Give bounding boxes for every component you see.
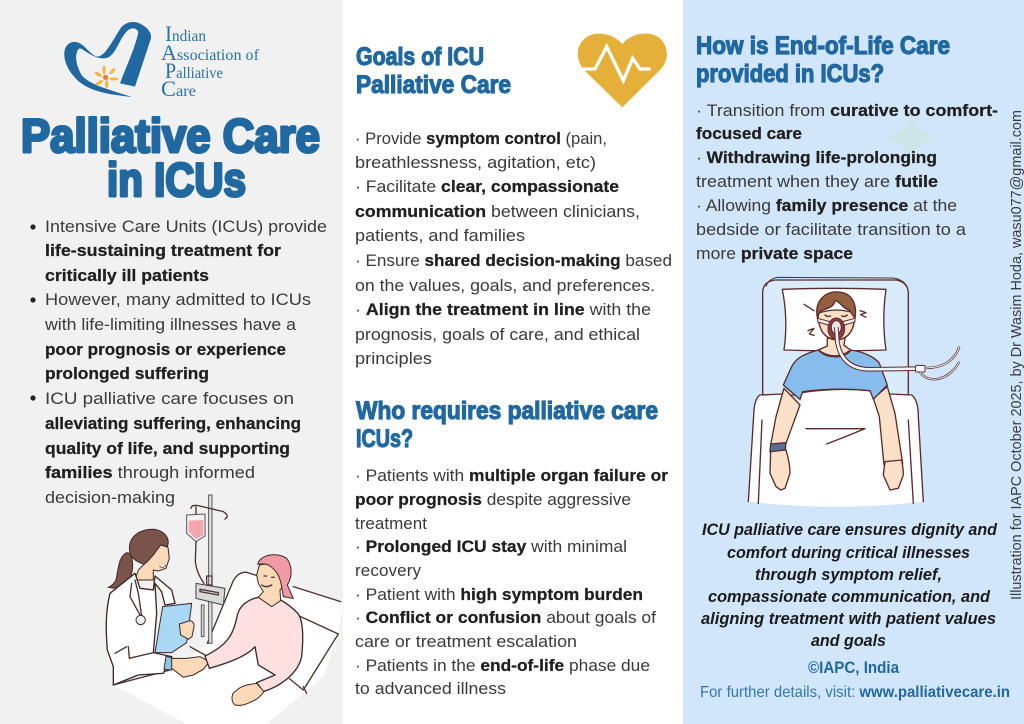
logo wordmark: Care [161, 76, 196, 101]
text block: goals list: · Provide symptom control (pain, [355, 129, 607, 148]
bed [113, 572, 343, 724]
text block: goals list: patients, and families [355, 226, 525, 245]
heading: goals [356, 43, 511, 99]
text block: introduction bullets: prolonged suffering [45, 364, 209, 383]
doctor hand on clipboard [179, 621, 194, 639]
logo sun flower [94, 66, 118, 88]
text block: goals list [355, 129, 672, 368]
heading: who requires palliative care: Who requires palliative care [356, 397, 658, 425]
doctor hair and ponytail [108, 529, 168, 588]
illustration: patient on ventilator mask in bed [748, 277, 959, 507]
heading: how is end-of-life care provided [696, 32, 950, 88]
text block: introduction bullets: critically ill patients [45, 266, 209, 285]
text block: end-of-life list: more private space [696, 244, 853, 263]
pillow [782, 288, 886, 351]
callout: closing statement: and goals [811, 631, 886, 650]
logo wordmark [161, 21, 260, 101]
title [21, 109, 320, 206]
cuff and joined hands [164, 656, 173, 670]
IV pole [201, 495, 212, 643]
callout: closing statement: comfort during critical illnesses [727, 543, 970, 562]
patient hand [232, 683, 264, 705]
heading: how is end-of-life care provided: provided in ICUs? [696, 60, 884, 88]
mattress and blanket [748, 389, 923, 507]
callout: closing statement: compassionate communication, and [708, 587, 991, 606]
arms [771, 388, 800, 445]
stethoscope [130, 580, 142, 616]
text block: goals list: · Align the treatment in line with the [355, 300, 651, 319]
text block: introduction bullets: alleviating suffering, enhancing [45, 414, 301, 433]
text block: introduction bullets: ICU palliative care focuses on [45, 389, 294, 408]
infusion pump [196, 583, 225, 605]
heading: who requires palliative care [356, 397, 658, 453]
text block: end-of-life list: · Allowing family presence at the [696, 196, 957, 215]
title: in ICUs [107, 153, 246, 206]
logo wordmark: Palliative [165, 58, 223, 83]
text block: introduction bullets: quality of life, and supporting [45, 439, 290, 458]
heading: who requires palliative care: ICUs? [356, 425, 413, 453]
text block: goals list: communication between clinicians, [355, 202, 640, 221]
illustration: doctor holding patient's hand [106, 495, 343, 724]
face [818, 310, 855, 340]
text block: end-of-life list: focused care [696, 124, 802, 143]
icon: IAPC logo [64, 21, 260, 101]
text block: introduction bullets: with life-limiting illnesses have a [44, 315, 297, 334]
patient sweater [205, 597, 303, 692]
callout: closing statement: aligning treatment with patient values [701, 609, 996, 628]
text block: who requires list: recovery [355, 561, 422, 580]
panel: left introduction background [0, 0, 343, 724]
text block: who requires list: care or treatment escalation [355, 632, 577, 651]
icon: faint sparkle [887, 115, 935, 162]
text block: who requires list: · Conflict or confusion about goals of [355, 608, 656, 627]
patient headscarf [258, 555, 293, 598]
bullet dots [30, 224, 36, 401]
text block: end-of-life list: · Transition from curative to comfort- [696, 101, 998, 120]
logo wordmark: Indian [165, 21, 206, 46]
callout: closing statement: through symptom relief, [755, 565, 942, 584]
text block: who requires list: · Patient with high symptom burden [355, 585, 643, 604]
text block: end-of-life list: · Withdrawing life-prolonging [696, 148, 937, 167]
heading: goals: Goals of ICU [356, 43, 484, 71]
text block: goals list: on the values, goals, and preferences. [355, 276, 655, 295]
heading: how is end-of-life care provided: How is End-of-Life Care [696, 32, 950, 60]
text block: introduction bullets: decision-making [45, 488, 175, 507]
callout: closing statement: ICU palliative care ensures dignity and [702, 520, 998, 539]
neck [818, 338, 851, 356]
text block: goals list: principles [355, 349, 432, 368]
text block: introduction bullets: However, many admitted to ICUs [45, 290, 311, 309]
title: Palliative Care [21, 109, 320, 162]
icon: heart with pulse [578, 33, 667, 107]
logo wordmark: Association of [161, 40, 260, 65]
text block: introduction bullets: life-sustaining treatment for [45, 241, 281, 260]
doctor face [135, 545, 169, 580]
text block: who requires list: to advanced illness [355, 679, 506, 698]
doctor scrubs [140, 588, 157, 613]
text block: goals list: prognosis, goals of care, and ethical [355, 325, 640, 344]
right hand [883, 460, 903, 490]
patient face and neck [257, 562, 285, 607]
text block: end-of-life list: bedside or facilitate transition to a [696, 220, 967, 239]
oxygen tube [836, 327, 917, 369]
text block: who requires list: · Patients in the end-of-life phase due [355, 656, 650, 675]
clipboard [155, 603, 192, 653]
oxygen mask [817, 318, 855, 325]
text block: introduction bullets: poor prognosis or experience [45, 340, 286, 359]
text: copyright: ©IAPC, India [808, 659, 900, 677]
logo ribbon heart [64, 22, 151, 97]
hospital gown [783, 350, 887, 399]
callout: closing statement [701, 520, 998, 650]
heading: goals: Palliative Care [356, 71, 511, 99]
text block: who requires list: poor prognosis despite aggressive [355, 490, 631, 509]
text block: goals list: breathlessness, agitation, etc) [355, 153, 596, 172]
text: website line: For further details, visit: www.palliativecare.in [700, 684, 1010, 701]
headboard [763, 280, 908, 395]
coat sleeve seam [115, 647, 153, 658]
text block: introduction bullets: Intensive Care Units (ICUs) provide [45, 217, 327, 236]
left hand with watch [770, 450, 790, 490]
text block: who requires list: treatment [355, 514, 427, 533]
text block: who requires list: · Prolonged ICU stay with minimal [355, 537, 627, 556]
IV tube [195, 542, 204, 583]
text block: introduction bullets [30, 217, 327, 507]
text block: goals list: · Ensure shared decision-making based [355, 251, 672, 270]
doctor white coat [106, 573, 175, 685]
text block: goals list: · Facilitate clear, compassionate [355, 177, 619, 196]
IV hook [191, 505, 227, 519]
text block: end-of-life list: treatment when they are futile [696, 172, 938, 191]
panel: right end-of-life background [683, 0, 1024, 724]
hair [817, 292, 855, 318]
text block: who requires list [355, 466, 668, 698]
IV bag [187, 514, 205, 542]
text block: end-of-life list [696, 101, 998, 263]
text block: introduction bullets: families through informed [45, 463, 255, 482]
text block: who requires list: · Patients with multiple organ failure or [355, 466, 668, 485]
